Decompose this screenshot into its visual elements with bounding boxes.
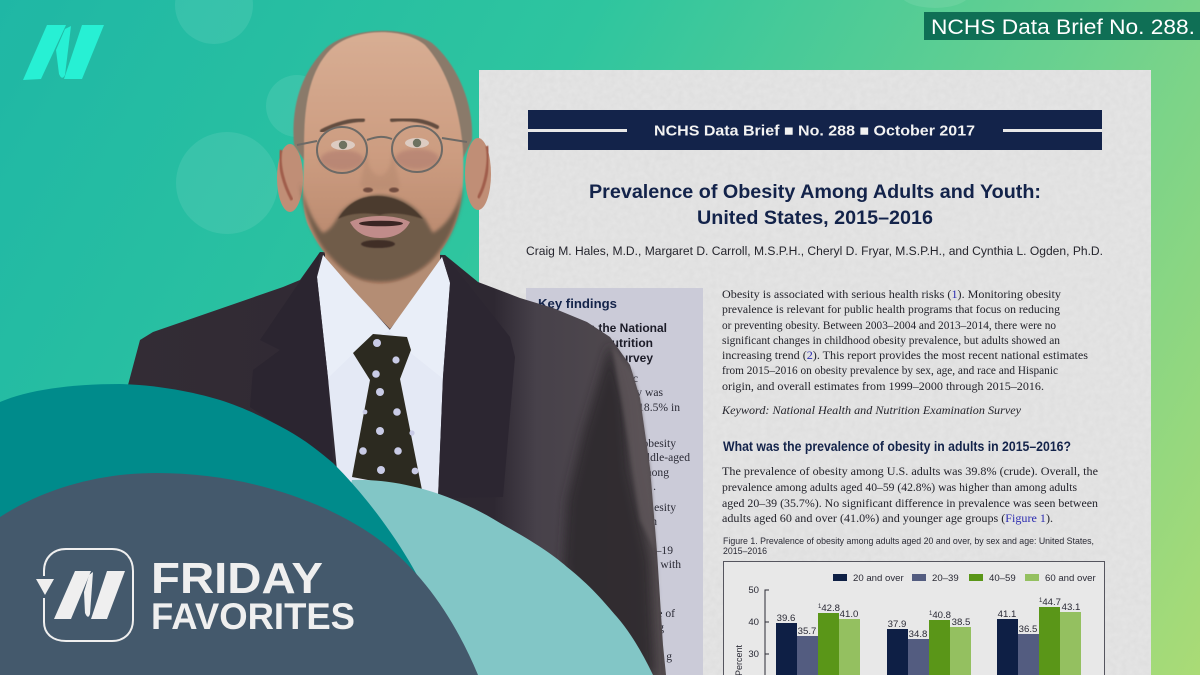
key findings sidebar: g xyxy=(666,650,672,663)
paper masthead: NCHS Data Brief ■ No. 288 ■ October 2017 xyxy=(654,122,975,140)
key findings sidebar: Data from the National xyxy=(539,321,667,335)
nose xyxy=(360,150,400,192)
chart legend xyxy=(833,574,1096,581)
key findings sidebar: –19 xyxy=(655,544,673,557)
y axis: 40 xyxy=(748,617,759,628)
chart legend: 20–39 xyxy=(932,573,959,584)
adults paragraph xyxy=(722,465,1098,525)
neck xyxy=(325,245,440,329)
paper title: Prevalence of Obesity Among Adults and Youth: xyxy=(589,181,1041,203)
figure caption: 2015–2016 xyxy=(723,546,767,556)
glasses xyxy=(297,126,467,173)
intro paragraph: Obesity is associated with serious health risks ( 1). Monitoring obesity xyxy=(722,288,1061,301)
arc: deep teal xyxy=(0,384,450,675)
bars: all adults group: 42.8 xyxy=(821,603,840,614)
key findings sidebar: g xyxy=(658,621,664,634)
intro paragraph: or preventing obesity. Between 2003–2004 and 2013–2014, there were no xyxy=(722,319,1056,332)
mouth xyxy=(350,216,410,248)
beard xyxy=(300,183,463,282)
bars: women group: 1 xyxy=(1039,598,1043,604)
key findings sidebar: 18.5% in xyxy=(638,401,680,414)
logo: NutritionFacts N mark xyxy=(23,25,104,80)
logo: Friday Favorites badge xyxy=(36,549,133,641)
intro paragraph: increasing trend ( 2). This report provides the most recent national estimates xyxy=(722,349,1088,362)
key findings sidebar: y was xyxy=(636,386,663,399)
presenter xyxy=(128,31,666,675)
bar chart: obesity prevalence by age xyxy=(724,562,1104,675)
adults paragraph: prevalence among adults aged 40–59 (42.8%) was higher than among adults xyxy=(722,481,1077,494)
bars: women group: 36.5 xyxy=(1019,624,1037,635)
decorative bokeh circles xyxy=(175,0,971,234)
y axis xyxy=(734,585,769,675)
bars: all adults group: 41.0 xyxy=(840,609,858,620)
eyebrows xyxy=(322,119,437,131)
panel: research paper page xyxy=(479,70,1151,675)
lapels xyxy=(250,252,515,498)
bars: men group: 38.5 xyxy=(952,617,970,628)
paper title xyxy=(589,181,1041,229)
key findings sidebar: Examination Survey xyxy=(538,351,653,365)
keyword line: Keyword: National Health and Nutrition Examination Survey xyxy=(721,404,1022,417)
intro paragraph: significant changes in childhood obesity prevalence, but adults showed an xyxy=(722,334,1060,347)
intro paragraph: from 2015–2016 on obesity prevalence by sex, age, and race and Hispanic xyxy=(722,364,1058,377)
key findings sidebar: n xyxy=(651,515,657,528)
key findings sidebar: Key findings xyxy=(538,296,617,311)
key findings sidebar: ldle-aged xyxy=(647,451,690,464)
chart legend: 60 and over xyxy=(1045,573,1096,584)
bars: all adults group xyxy=(776,603,860,675)
eyes xyxy=(331,138,429,150)
key findings sidebar: esity xyxy=(654,501,676,514)
bars: women group: 44.7 xyxy=(1042,597,1061,608)
bars: men group xyxy=(887,610,971,675)
bars: all adults group: 35.7 xyxy=(798,626,816,637)
key findings sidebar: nong xyxy=(646,466,669,479)
jacket sleeve crease xyxy=(563,343,655,675)
intro paragraph xyxy=(722,288,1088,393)
series title: FRIDAY xyxy=(151,554,323,603)
key findings sidebar: c xyxy=(633,372,638,385)
key findings sidebar: obesity xyxy=(642,437,676,450)
section heading: What was the prevalence of obesity in adults in 2015–2016? xyxy=(723,439,1071,454)
bars: all adults group: 39.6 xyxy=(777,613,795,624)
ears xyxy=(277,138,491,212)
jacket sleeve highlight xyxy=(612,345,656,552)
chart legend: 40–59 xyxy=(989,573,1016,584)
under-eye lens tint xyxy=(320,149,439,170)
bars: men group: 34.8 xyxy=(909,629,927,640)
bars: men group: 37.9 xyxy=(888,619,906,630)
face xyxy=(303,32,463,284)
paper authors: Craig M. Hales, M.D., Margaret D. Carroll, M.S.P.H., Cheryl D. Fryar, M.S.P.H., and Cynthia L. Ogden, Ph.D. xyxy=(526,244,1103,258)
bars: women group xyxy=(997,597,1081,675)
arc: light teal xyxy=(300,480,653,675)
bars: men group: 1 xyxy=(929,611,933,617)
intro paragraph: origin, and overall estimates from 1999–2000 through 2015–2016. xyxy=(722,380,1044,393)
figure caption: Figure 1. Prevalence of obesity among adults aged 20 and over, by sex and age: United States, xyxy=(723,536,1094,546)
adults paragraph: The prevalence of obesity among U.S. adults was 39.8% (crude). Overall, the xyxy=(722,465,1098,478)
bars: men group: 40.8 xyxy=(932,610,951,621)
figure caption xyxy=(723,536,1094,556)
key findings sidebar: with xyxy=(660,558,681,571)
shirt xyxy=(323,255,450,498)
key findings sidebar: e of xyxy=(657,607,675,620)
y axis: 50 xyxy=(748,585,759,596)
bars: women group: 41.1 xyxy=(998,609,1016,620)
arc: slate xyxy=(0,473,478,675)
shirt collar xyxy=(317,255,450,378)
paper title: United States, 2015–2016 xyxy=(697,207,933,229)
source badge: NCHS Data Brief No. 288. xyxy=(931,16,1195,39)
series title xyxy=(151,554,355,637)
key findings sidebar: Health and Nutrition xyxy=(538,336,653,350)
bars: women group: 43.1 xyxy=(1062,602,1080,613)
suit jacket xyxy=(128,252,666,675)
chart legend: 20 and over xyxy=(853,573,904,584)
bars: all adults group: 1 xyxy=(818,604,822,610)
paper masthead xyxy=(528,110,1102,150)
key findings sidebar: . xyxy=(653,480,656,493)
series title: FAVORITES xyxy=(151,596,355,637)
mustache xyxy=(338,196,423,219)
tie xyxy=(352,334,422,490)
adults paragraph: adults aged 60 and over (41.0%) and younger age groups ( Figure 1). xyxy=(722,512,1053,525)
y axis: 30 xyxy=(748,649,759,660)
intro paragraph: prevalence is relevant for public health programs that focus on reducing xyxy=(722,303,1060,316)
adults paragraph: aged 20–39 (35.7%). No significant difference in prevalence was seen between xyxy=(722,497,1098,510)
hair xyxy=(293,31,472,160)
key findings sidebar xyxy=(526,288,703,675)
